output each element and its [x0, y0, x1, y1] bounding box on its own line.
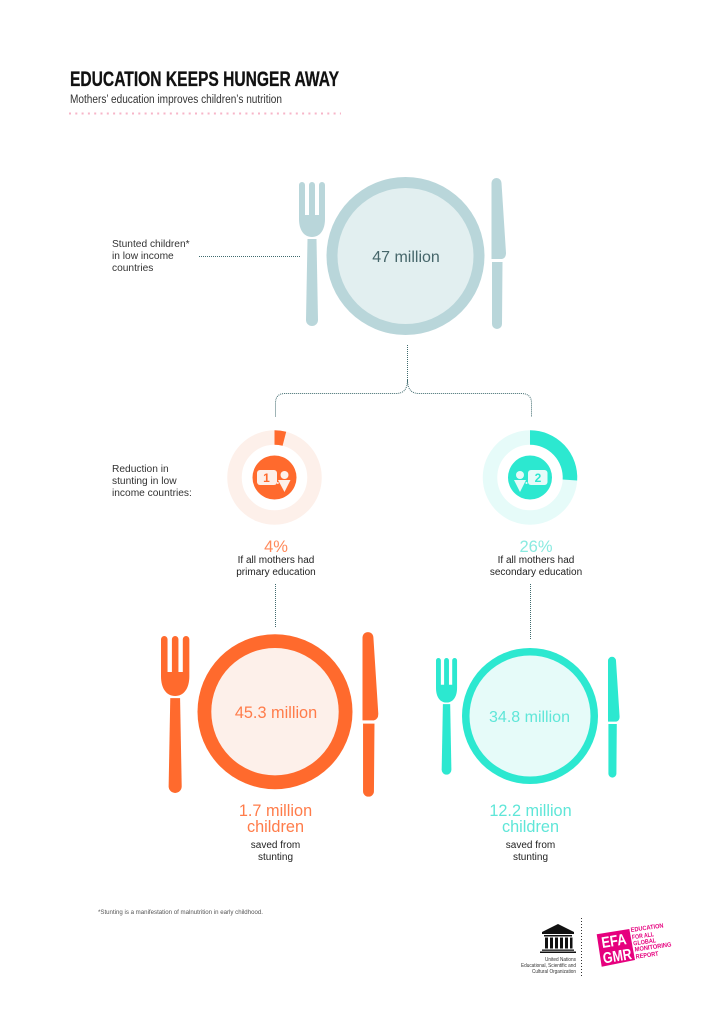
result: 12.2 million children: 12.2 million — [489, 802, 572, 820]
icon: secondary education mother: 2 — [535, 471, 542, 485]
caption: secondary education: If all mothers had — [498, 555, 574, 566]
logo: EFA GMR: REPORT — [635, 951, 659, 961]
logo: EFA GMR: GMR — [602, 946, 633, 967]
icon: fork, grey — [299, 182, 325, 326]
footnote: *Stunting is a manifestation of malnutrition in early childhood. — [98, 909, 263, 916]
icon: fork, cyan — [436, 658, 457, 775]
stat: 4 percent: 4% — [264, 538, 288, 556]
label: reduction in stunting: Reduction in — [112, 464, 169, 475]
label: stunted children: Stunted children* — [112, 239, 190, 250]
logo: EFA GMR — [597, 922, 672, 967]
plate: 34.8 million: 34.8 million — [489, 709, 570, 726]
label: stunted children: countries — [112, 263, 153, 274]
plate: 47 million: 47 million — [372, 249, 440, 266]
label: reduction in stunting: income countries: — [112, 488, 192, 499]
donut: 26 percent, secondary — [490, 438, 570, 518]
caption: primary education: primary education — [236, 567, 316, 578]
logo: EFA GMR: FOR ALL — [632, 931, 654, 941]
caption: secondary education — [490, 555, 582, 578]
label: stunted children: in low income — [112, 251, 174, 262]
logo: UNESCO — [521, 924, 576, 975]
plate: 45.3 million — [198, 634, 352, 789]
plate: 34.8 million — [462, 648, 598, 784]
result: 1.7 million children: children — [247, 818, 304, 836]
icon: knife, orange — [362, 632, 378, 797]
plate: 45.3 million: 45.3 million — [235, 704, 317, 722]
logo: UNESCO: Cultural Organization — [532, 969, 576, 975]
donut: 4 percent, primary — [234, 438, 314, 518]
title: EDUCATION KEEPS HUNGER AWAY — [70, 67, 339, 91]
icon: fork, orange — [161, 636, 189, 793]
result: 1.7 million children: stunting — [258, 852, 293, 863]
caption: secondary education: secondary education — [490, 567, 582, 578]
label: reduction in stunting — [112, 464, 192, 499]
plate: 47 million — [326, 177, 484, 335]
result: 12.2 million children: saved from — [506, 840, 555, 851]
result: 1.7 million children: 1.7 million — [239, 802, 312, 820]
connector: tree from top plate to the two scenarios — [276, 345, 532, 417]
icon: knife, grey — [492, 178, 506, 329]
result: 1.7 million children — [239, 802, 312, 863]
logo: EFA GMR: MONITORING — [634, 941, 672, 953]
caption: primary education: If all mothers had — [238, 555, 314, 566]
logo: UNESCO: Educational, Scientific and — [521, 963, 576, 969]
stat: 26 percent: 26% — [519, 538, 553, 556]
logo: EFA GMR: EFA — [600, 931, 628, 952]
caption: primary education — [236, 555, 316, 578]
label: reduction in stunting: stunting in low — [112, 476, 177, 487]
logo: EFA GMR: GLOBAL — [633, 937, 657, 947]
label: stunted children — [112, 239, 190, 274]
icon: primary education mother: 1 — [263, 471, 270, 485]
logo: EFA GMR: EDUCATION — [630, 922, 664, 934]
result: 12.2 million children: children — [502, 818, 559, 836]
result: 1.7 million children: saved from — [251, 840, 300, 851]
result: 12.2 million children: stunting — [513, 852, 548, 863]
subtitle: Mothers’ education improves children’s nutrition — [70, 94, 282, 106]
logo: UNESCO: United Nations — [545, 957, 576, 963]
icon: knife, cyan — [608, 657, 620, 778]
result: 12.2 million children — [489, 802, 572, 863]
